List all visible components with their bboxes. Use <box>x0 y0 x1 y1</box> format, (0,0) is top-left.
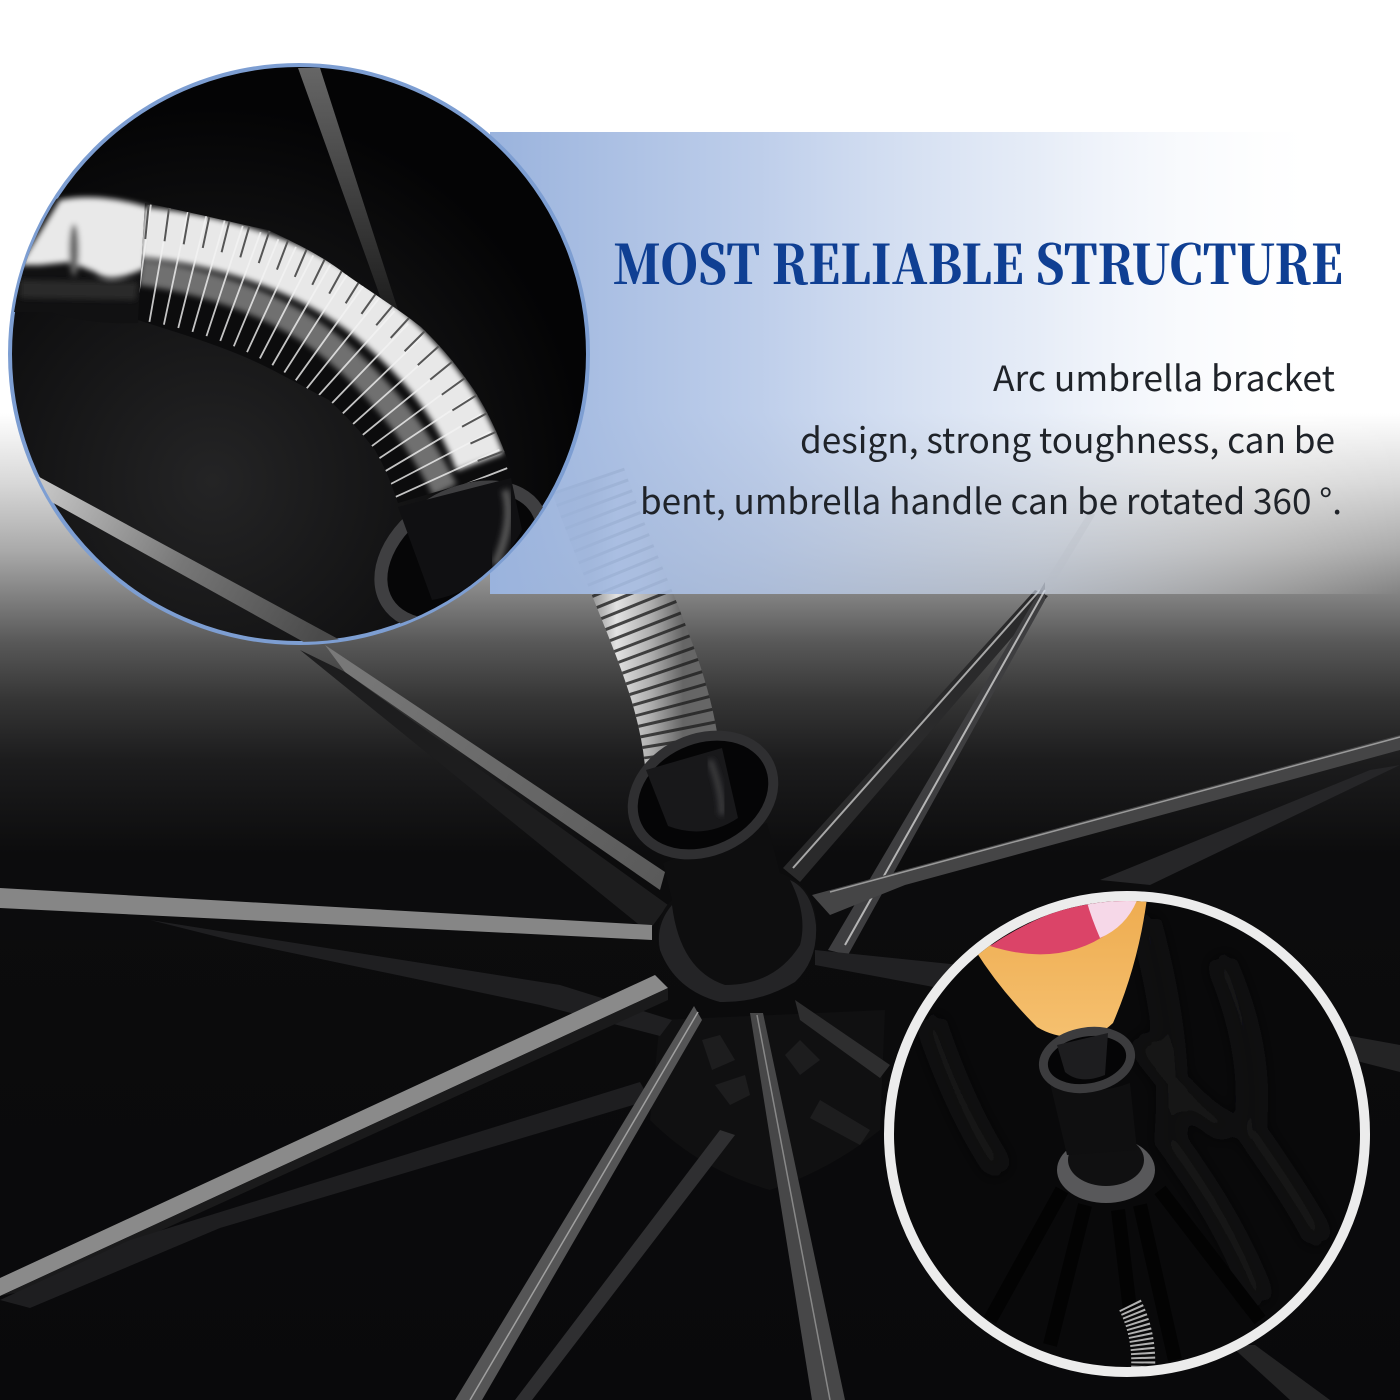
central hub <box>613 713 817 1002</box>
upper-left rib <box>300 650 668 932</box>
miniature body <box>1066 1144 1136 1155</box>
joint lower grey <box>20 280 138 300</box>
blue text panel <box>490 132 1400 594</box>
description text: design, strong toughness, can be <box>800 413 1335 464</box>
dark stem in cup <box>646 748 738 831</box>
miniature stem in cup <box>1039 1025 1135 1095</box>
panel: left detail circle <box>10 65 588 654</box>
description text <box>640 351 1342 525</box>
stem into collar <box>398 478 522 600</box>
right ribs <box>812 735 1400 915</box>
pink handle top <box>990 901 1132 954</box>
flexible coil <box>135 200 515 510</box>
lower-left ribs <box>0 975 668 1296</box>
lower rib in left circle <box>30 472 340 650</box>
umbrella ribs <box>0 510 1400 1400</box>
fabric wrinkles <box>930 920 1320 1300</box>
miniature flare <box>1057 1144 1155 1203</box>
description text: bent, umbrella handle can be rotated 360 °. <box>640 474 1342 525</box>
umbrella underside crown <box>650 1010 885 1190</box>
upper-right ribs <box>783 590 1048 882</box>
hub body and flare <box>658 823 817 1002</box>
central spring stem <box>588 480 683 765</box>
miniature ribs <box>1231 1271 1258 1306</box>
background rib in left circle <box>298 68 398 310</box>
coil mid grey band <box>140 272 445 490</box>
left rib <box>0 888 652 940</box>
coil white rings <box>142 262 455 494</box>
miniature spring <box>1130 1305 1143 1370</box>
panel: right detail circle <box>889 890 1365 1372</box>
bottom ribs <box>455 1006 702 1400</box>
cup <box>613 713 793 877</box>
description text: Arc umbrella bracket <box>993 351 1335 402</box>
collar in left circle <box>374 480 543 624</box>
yellow cone handle <box>978 901 1146 1036</box>
coil dark ring lines on highlight <box>146 222 494 456</box>
metal joint <box>14 198 58 312</box>
coil highlight band <box>142 232 480 462</box>
joint dark reflection <box>69 224 79 276</box>
coil dark base <box>138 203 466 500</box>
joint highlight <box>20 197 150 278</box>
